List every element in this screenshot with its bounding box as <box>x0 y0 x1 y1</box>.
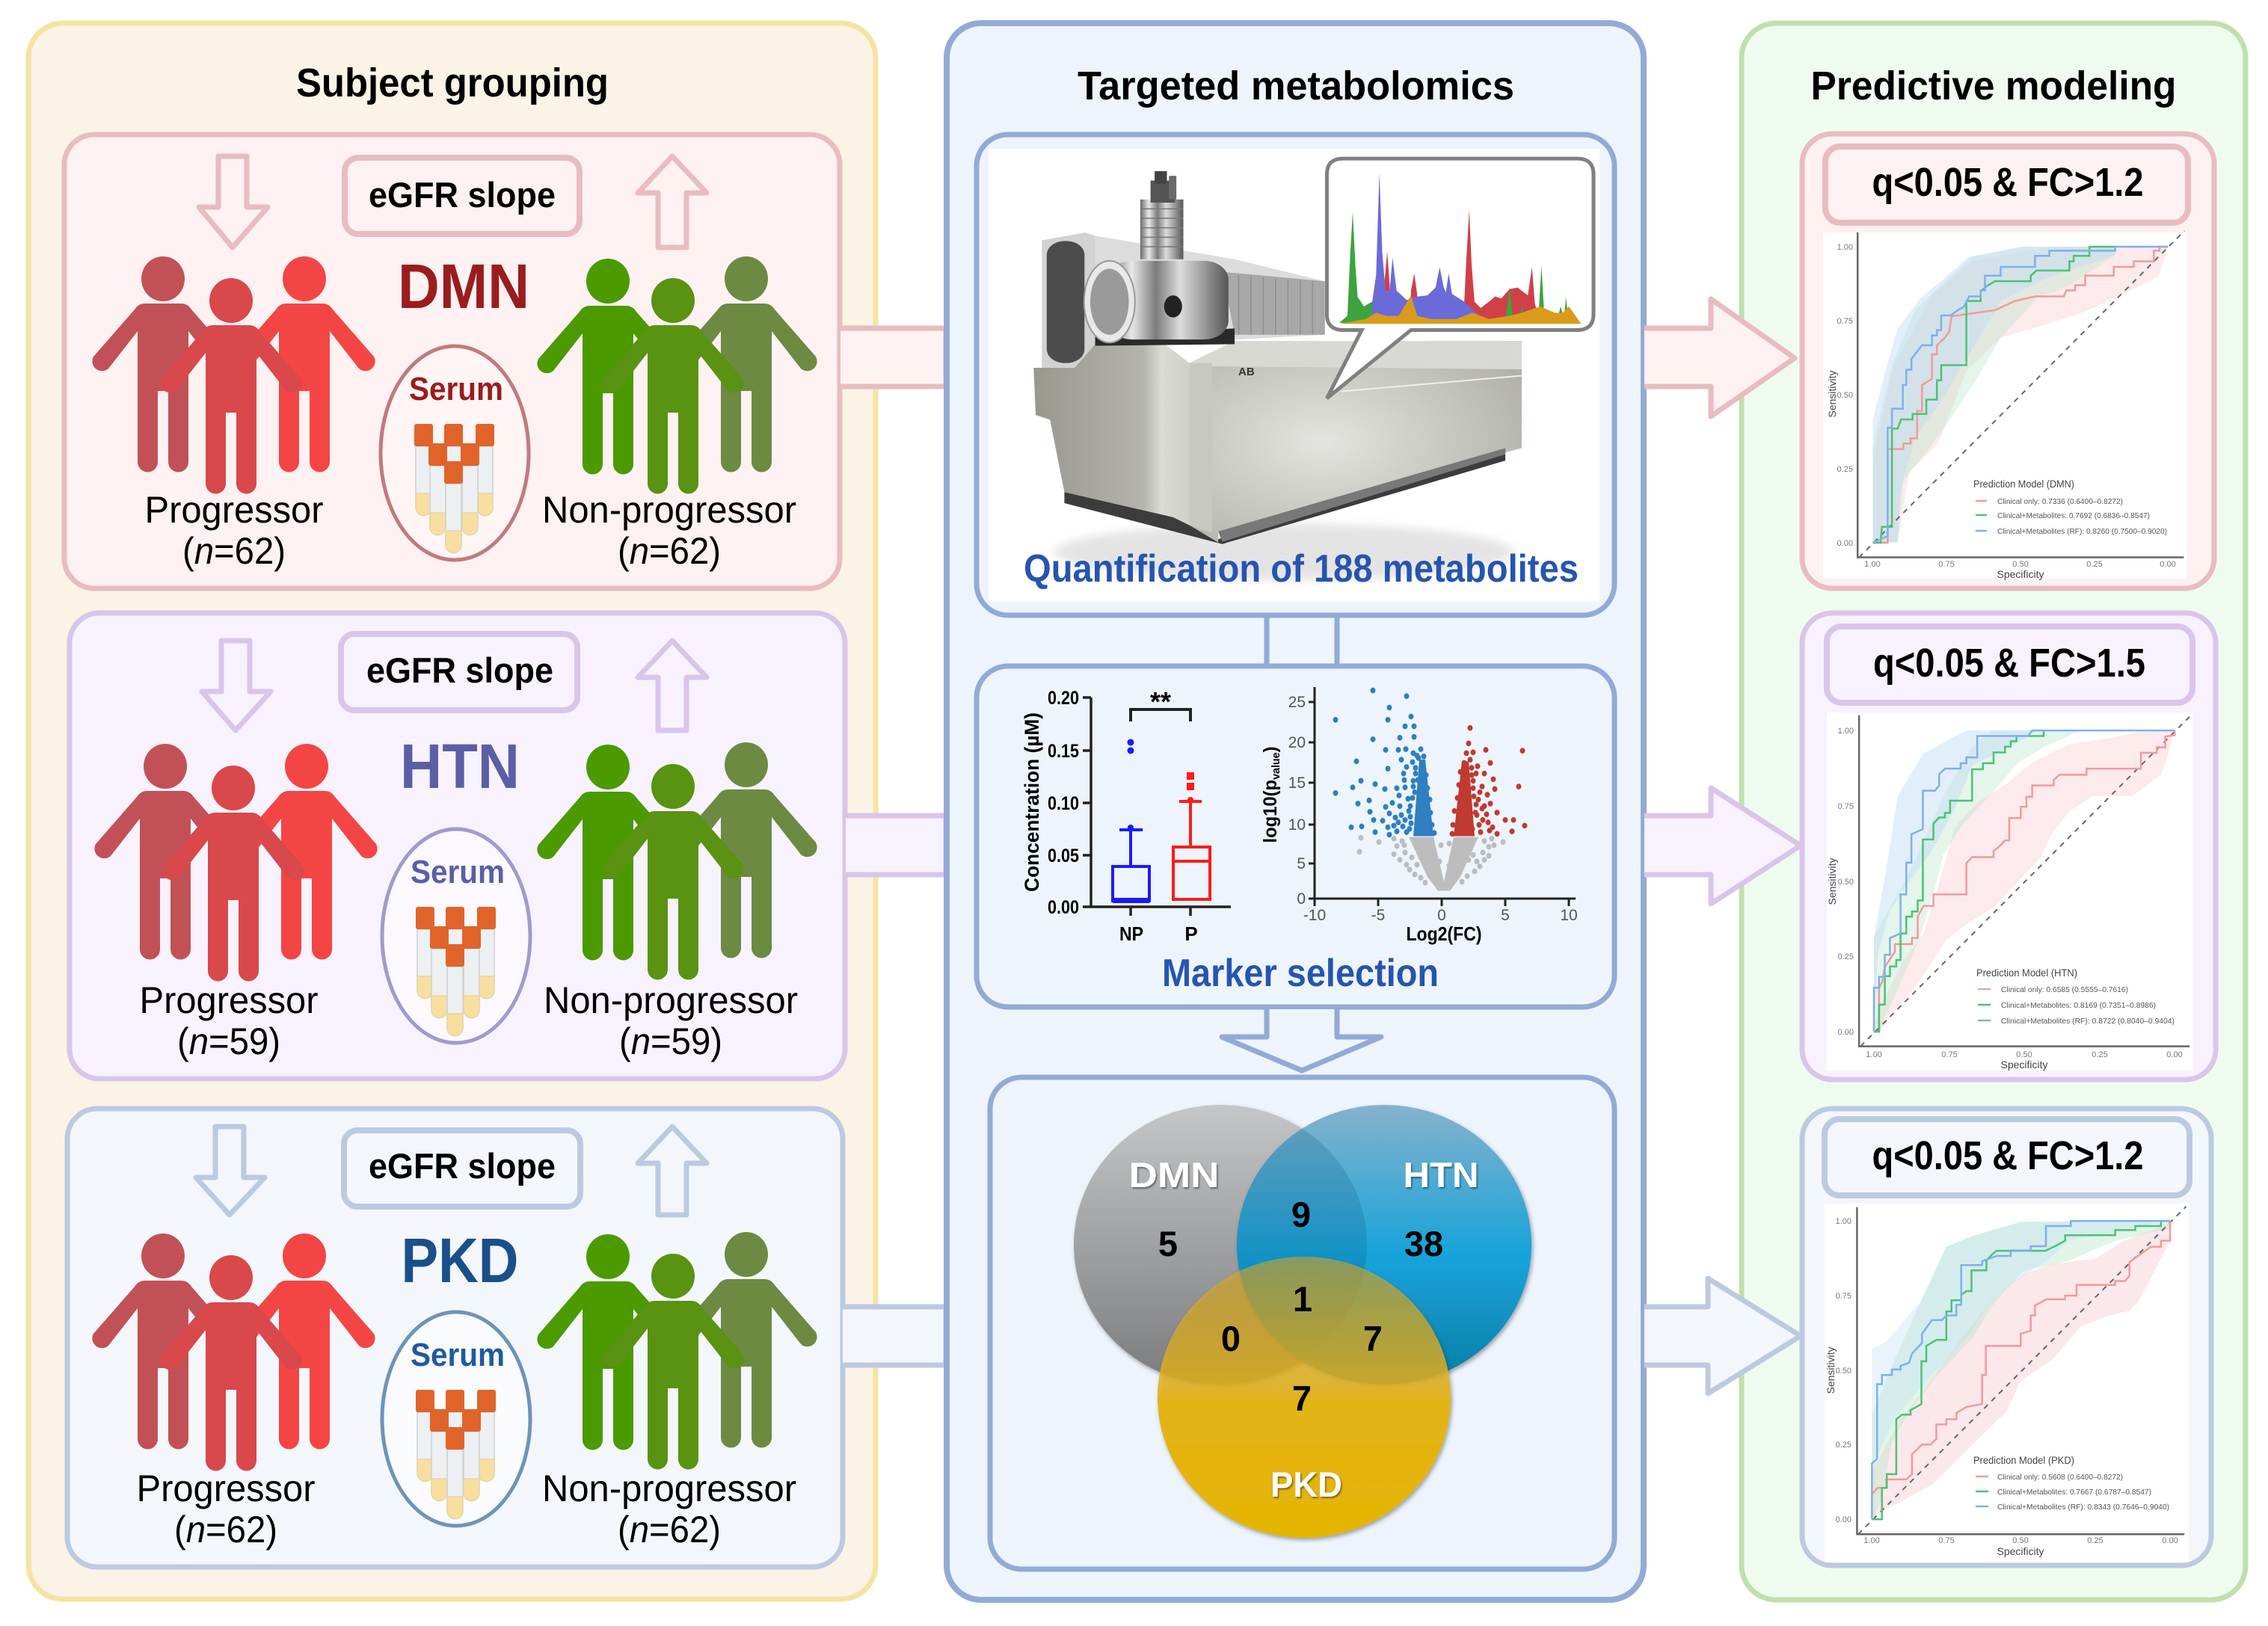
chart: ROC curves HTN: Clinical+Metabolites (RF): 0.8722 (0.8040–0.9404) <box>2001 1017 2175 1026</box>
chart: volcano plot: -5 <box>1371 907 1385 924</box>
label: non-progressor count <box>542 1468 796 1550</box>
chart: ROC curves HTN: 0.25 <box>1838 952 1854 961</box>
chart: ROC curves DMN: 1.00 <box>1837 243 1853 252</box>
label: eGFR slope: eGFR slope <box>369 175 556 215</box>
chart: ROC curves HTN: Clinical+Metabolites: 0.8169 (0.7351–0.8986) <box>2001 1001 2156 1010</box>
chart: ROC curves HTN: 0.50 <box>1838 878 1854 887</box>
heading: targeted metabolomics: Targeted metabolomics <box>1078 64 1514 108</box>
icon: non-progressors <box>537 256 817 493</box>
instrument logo: AB <box>1238 366 1255 378</box>
chart: ROC curves DMN: Clinical+Metabolites: 0.7692 (0.6836–0.8547) <box>1997 511 2150 520</box>
label: eGFR slope <box>344 1130 580 1207</box>
chart: ROC curves DMN: Sensitivity <box>1826 370 1838 418</box>
connector lines between boxes <box>1267 612 1337 667</box>
venn counts: 7 <box>1363 1319 1383 1358</box>
chart: ROC curves DMN: 0.75 <box>1938 560 1955 569</box>
chart: ROC curves HTN: 0.25 <box>2092 1050 2108 1059</box>
arrow: metabolomics to PKD model <box>1644 1278 1801 1394</box>
panel: HTN group <box>70 613 845 1079</box>
label: non-progressor count: (n=62) <box>618 1509 721 1550</box>
chart: ROC curves DMN: Specificity <box>1997 568 2044 580</box>
chart: box plot: ** <box>1150 686 1171 717</box>
chart: ROC curves PKD: Prediction Model (PKD) <box>1973 1454 2074 1466</box>
chart: ROC curves PKD: 0.00 <box>1836 1515 1851 1524</box>
label: progressor count: Progressor <box>136 1468 316 1509</box>
chart: ROC curves DMN: Clinical only: 0.7336 (0.6400–0.8272) <box>1997 497 2123 506</box>
chart: box plot <box>1021 686 1231 945</box>
chart: volcano plot: 0 <box>1437 907 1446 924</box>
chart: ROC curves HTN: 0.00 <box>2166 1050 2183 1059</box>
chart: box plot: 0.00 <box>1048 897 1079 918</box>
panel: PKD ROC <box>1802 1109 2211 1565</box>
panel: targeted metabolomics background <box>947 23 1644 1600</box>
chart: ROC curves PKD: 0.75 <box>1938 1536 1955 1545</box>
chart: volcano plot: 15 <box>1288 774 1306 792</box>
chart: ROC curves DMN: 0.50 <box>1837 391 1853 400</box>
icon: non-progressors <box>537 1232 817 1470</box>
panel: PKD group <box>67 1109 843 1567</box>
chart: ROC curves DMN: Prediction Model (DMN) <box>1973 478 2074 490</box>
label: progressor count <box>145 489 323 572</box>
connector: PKD to metabolomics <box>843 1307 946 1365</box>
label: eGFR slope: eGFR slope <box>366 650 553 690</box>
chart: ROC curves DMN: 0.25 <box>2086 560 2103 569</box>
label: progressor count: Progressor <box>139 979 319 1021</box>
panel: instrument <box>977 135 1614 615</box>
panel: venn diagram <box>990 1077 1614 1569</box>
group name: HTN: HTN <box>400 731 520 801</box>
chart: ROC curves PKD: Specificity <box>1997 1545 2044 1557</box>
arrow: eGFR down <box>199 156 268 247</box>
label: non-progressor count: (n=59) <box>619 1020 722 1062</box>
threshold label <box>1827 626 2192 703</box>
threshold label: q<0.05 & FC>1.2 <box>1872 160 2143 205</box>
chart: box plot: Concentration (µM) <box>1021 712 1043 892</box>
chart: volcano plot: Log2(FC) <box>1406 923 1482 945</box>
chart: ROC curves PKD: Clinical+Metabolites: 0.7667 (0.6787–0.8547) <box>1997 1488 2151 1497</box>
chart: ROC curves PKD: 0.00 <box>2162 1536 2178 1545</box>
connector: DMN to metabolomics <box>840 328 946 387</box>
caption: quantification: Quantification of 188 metabolites <box>1024 547 1579 591</box>
chart: ROC curves PKD <box>1825 1204 2189 1562</box>
label: progressor count <box>136 1468 316 1550</box>
chart: box plot: 0.05 <box>1048 846 1079 866</box>
arrow: eGFR down <box>196 1127 265 1215</box>
venn set: DMN <box>1074 1105 1367 1385</box>
panel: DMN ROC <box>1802 134 2214 588</box>
serum sample icon: Serum <box>409 371 503 407</box>
panel: subject grouping background <box>28 23 876 1599</box>
label: progressor count: Progressor <box>145 489 323 531</box>
chart: ROC curves HTN: Clinical only: 0.6585 (0.5555–0.7616) <box>2001 985 2128 994</box>
chart: ROC curves HTN: Prediction Model (HTN) <box>1976 967 2077 979</box>
venn set labels <box>1129 1155 1479 1504</box>
chart: ROC curves PKD: Clinical+Metabolites (RF): 0.8343 (0.7646–0.9040) <box>1997 1503 2169 1512</box>
panel: DMN group <box>64 135 840 588</box>
chart: ROC curves HTN <box>1826 712 2192 1071</box>
chart: box plot: 0.20 <box>1048 688 1079 709</box>
venn counts <box>1158 1195 1443 1418</box>
chart: volcano plot: 0 <box>1297 890 1306 908</box>
threshold label: q<0.05 & FC>1.2 <box>1872 1133 2143 1178</box>
image: mass spectrometer <box>1033 158 1594 580</box>
chart: ROC curves HTN: Sensitivity <box>1826 857 1838 905</box>
chart: volcano plot: 10 <box>1560 907 1578 924</box>
threshold label: q<0.05 & FC>1.5 <box>1873 641 2145 686</box>
chart: ROC curves DMN: 0.25 <box>1837 465 1853 474</box>
arrow: eGFR down <box>202 641 271 730</box>
heading: predictive modeling: Predictive modeling <box>1811 64 2176 108</box>
venn counts: 1 <box>1293 1279 1312 1319</box>
chart: volcano plot <box>1260 687 1578 945</box>
chart: box plot: 0.10 <box>1048 793 1079 814</box>
chart: ROC curves HTN: 0.50 <box>2016 1050 2032 1059</box>
label: non-progressor count: (n=62) <box>618 530 721 572</box>
chart: ROC curves PKD: 0.50 <box>1836 1367 1851 1376</box>
chart: ROC curves PKD: 1.00 <box>1863 1536 1880 1545</box>
icon: progressors <box>92 1234 375 1471</box>
panel: marker selection <box>977 666 1614 1007</box>
venn set: HTN <box>1237 1105 1531 1385</box>
serum sample icon <box>382 1312 530 1526</box>
heading: subject grouping: Subject grouping <box>296 61 609 105</box>
label: progressor count: (n=59) <box>177 1020 280 1062</box>
chart: ROC curves PKD: 1.00 <box>1836 1217 1851 1226</box>
chart: ROC curves PKD: 0.25 <box>1836 1441 1851 1450</box>
arrow: eGFR up <box>638 156 707 247</box>
venn counts: 9 <box>1291 1195 1311 1234</box>
serum sample icon: Serum <box>411 854 505 890</box>
venn counts: 5 <box>1158 1224 1178 1263</box>
threshold label <box>1825 147 2188 223</box>
serum sample icon <box>381 346 529 560</box>
chart: ROC curves PKD: 0.50 <box>2012 1536 2029 1545</box>
chart: volcano plot: -10 <box>1303 907 1326 924</box>
venn set labels: DMN <box>1129 1155 1219 1195</box>
chart: ROC curves HTN: 0.75 <box>1838 802 1854 811</box>
connector: HTN to metabolomics <box>846 816 946 875</box>
label: progressor count: (n=62) <box>182 530 286 572</box>
chart: ROC curves DMN <box>1823 231 2186 580</box>
chart: ROC curves HTN: 0.00 <box>1838 1028 1854 1037</box>
label: non-progressor count <box>544 979 798 1062</box>
chart: ROC curves DMN: 1.00 <box>1864 560 1881 569</box>
chart: ROC curves HTN: 0.75 <box>1941 1050 1958 1059</box>
panel: HTN ROC <box>1802 613 2216 1080</box>
chart: ROC curves DMN: 0.00 <box>2160 560 2176 569</box>
icon: progressors <box>92 256 375 493</box>
arrow: eGFR up <box>638 1127 707 1215</box>
chart: ROC curves HTN: 1.00 <box>1866 1050 1882 1059</box>
chart: volcano plot: log10(p <box>1260 777 1281 843</box>
serum sample icon <box>382 829 530 1043</box>
chart: volcano plot: 5 <box>1501 907 1510 924</box>
chart: ROC curves PKD: Clinical only: 0.5608 (0.6400–0.8272) <box>1997 1473 2123 1482</box>
panel: predictive modeling background <box>1742 23 2246 1600</box>
venn counts: 0 <box>1221 1319 1241 1358</box>
group name: PKD: PKD <box>401 1225 519 1296</box>
chart: box plot: NP <box>1119 923 1143 945</box>
chromatogram <box>1339 173 1582 324</box>
chart: volcano plot: 20 <box>1288 734 1306 751</box>
chart: volcano plot: 5 <box>1297 855 1306 872</box>
chart: volcano plot: value <box>1270 752 1282 780</box>
icon: non-progressors <box>537 742 817 979</box>
label: eGFR slope: eGFR slope <box>369 1146 556 1186</box>
caption: marker selection: Marker selection <box>1162 952 1439 995</box>
serum sample icon: Serum <box>411 1337 505 1373</box>
arrow: metabolomics to DMN model <box>1644 299 1795 416</box>
chart: ROC curves DMN: Clinical+Metabolites (RF): 0.8260 (0.7500–0.9020) <box>1997 527 2167 536</box>
venn counts: 7 <box>1292 1379 1312 1418</box>
chart: ROC curves PKD: 0.25 <box>2087 1536 2103 1545</box>
venn overlap: DMN and HTN <box>1237 1129 1367 1271</box>
label: non-progressor count <box>542 489 796 572</box>
label: progressor count: (n=62) <box>174 1509 277 1550</box>
label: progressor count <box>139 979 319 1062</box>
callout bubble <box>1327 158 1594 398</box>
chart: ROC curves PKD: 0.75 <box>1836 1292 1851 1301</box>
venn set labels: PKD <box>1270 1465 1342 1504</box>
label: non-progressor count: Non-progressor <box>544 979 798 1021</box>
chart: volcano plot: 10 <box>1288 816 1306 834</box>
chart: box plot: P <box>1184 923 1198 945</box>
chart: volcano plot: 25 <box>1288 694 1306 711</box>
venn counts: 38 <box>1404 1224 1443 1263</box>
label: eGFR slope <box>345 158 580 234</box>
arrow: metabolomics to HTN model <box>1644 788 1801 904</box>
chart: ROC curves DMN: 0.50 <box>2012 560 2029 569</box>
chart: ROC curves DMN: 0.00 <box>1837 539 1853 548</box>
arrow: eGFR up <box>638 641 707 730</box>
chart: box plot: 0.15 <box>1048 741 1079 762</box>
chart: ROC curves PKD: Sensitivity <box>1825 1346 1837 1394</box>
venn set: PKD <box>1158 1257 1451 1538</box>
label: eGFR slope <box>341 634 577 710</box>
venn set labels: HTN <box>1403 1155 1479 1195</box>
arrow: markers down to venn <box>1222 1009 1381 1071</box>
chart: volcano plot: ) <box>1260 746 1281 752</box>
threshold label <box>1825 1119 2189 1195</box>
chart: ROC curves DMN: 0.75 <box>1837 317 1853 326</box>
icon: progressors <box>94 744 378 981</box>
chart: ROC curves HTN: Specificity <box>2000 1059 2048 1071</box>
label: non-progressor count: Non-progressor <box>542 1468 796 1509</box>
group name: DMN: DMN <box>398 251 529 321</box>
label: non-progressor count: Non-progressor <box>542 489 796 531</box>
chart: ROC curves HTN: 1.00 <box>1838 727 1854 736</box>
